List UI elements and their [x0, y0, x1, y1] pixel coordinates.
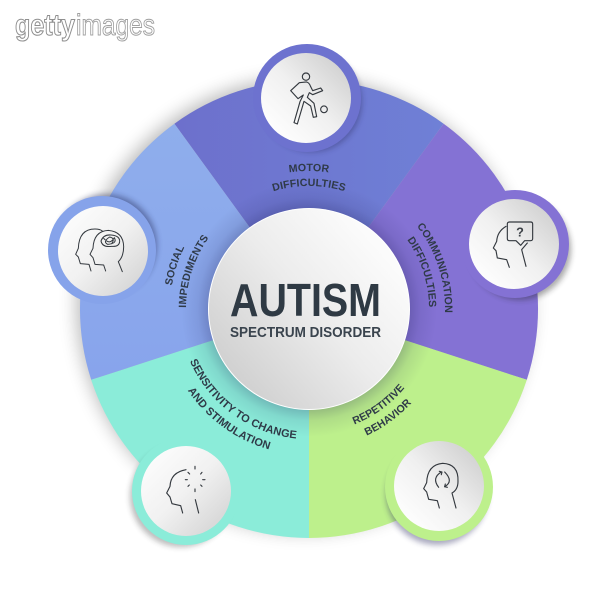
icon: head with cycle arrows: [424, 463, 458, 508]
text: motor difficulties: MOTOR: [289, 164, 329, 172]
text: motor difficulties: DIFFICULTIES: [272, 178, 346, 192]
panel: communication difficulties node: [461, 190, 571, 300]
icon: person kicking ball: [291, 73, 327, 124]
panel: pie of five segments: [80, 80, 538, 538]
text: repetitive behavior: BEHAVIOR: [364, 399, 412, 436]
panel: social impediments node: [48, 194, 157, 304]
segment: repetitive behavior: [309, 309, 527, 538]
watermark: gettyimages: [15, 9, 155, 42]
panel: sensitivity node: [130, 437, 240, 547]
icon: head with radiating dashes: [167, 466, 205, 513]
segment: sensitivity to change: [91, 309, 309, 538]
text: motor difficulties: [272, 164, 346, 192]
segment: motor difficulties: [174, 80, 444, 309]
watermark: gettyimages: getty: [15, 9, 75, 42]
text: sensitivity to change and stimulation: AND STIMULATION: [188, 388, 271, 450]
text: social impediments: [165, 235, 208, 308]
text: communication difficulties: COMMUNICATION: [418, 223, 452, 312]
pie drop shadow: [77, 78, 531, 532]
text: sensitivity to change and stimulation: SENSITIVITY TO CHANGE: [190, 359, 297, 438]
icon: two heads with tangled thought: [76, 229, 124, 272]
title: AUTISM: AUTISM: [230, 274, 381, 326]
panel: motor difficulties node: [253, 44, 362, 152]
watermark: gettyimages: images: [76, 9, 155, 42]
text: communication difficulties: DIFFICULTIES: [408, 236, 436, 307]
icon: head with question bubble: ?: [516, 226, 524, 240]
subtitle: spectrum disorder: SPECTRUM DISORDER: [230, 324, 381, 341]
text: repetitive behavior: REPETITIVE: [352, 384, 404, 424]
segment: social impediments: [80, 124, 309, 380]
text: social impediments: SOCIAL: [165, 247, 184, 286]
inner shading around hub: [181, 181, 437, 437]
panel: repetitive behavior node: [385, 433, 493, 545]
panel: central hub: [208, 208, 410, 410]
text: social impediments: IMPEDIMENTS: [178, 235, 208, 308]
segment: communication difficulties: [309, 124, 538, 380]
